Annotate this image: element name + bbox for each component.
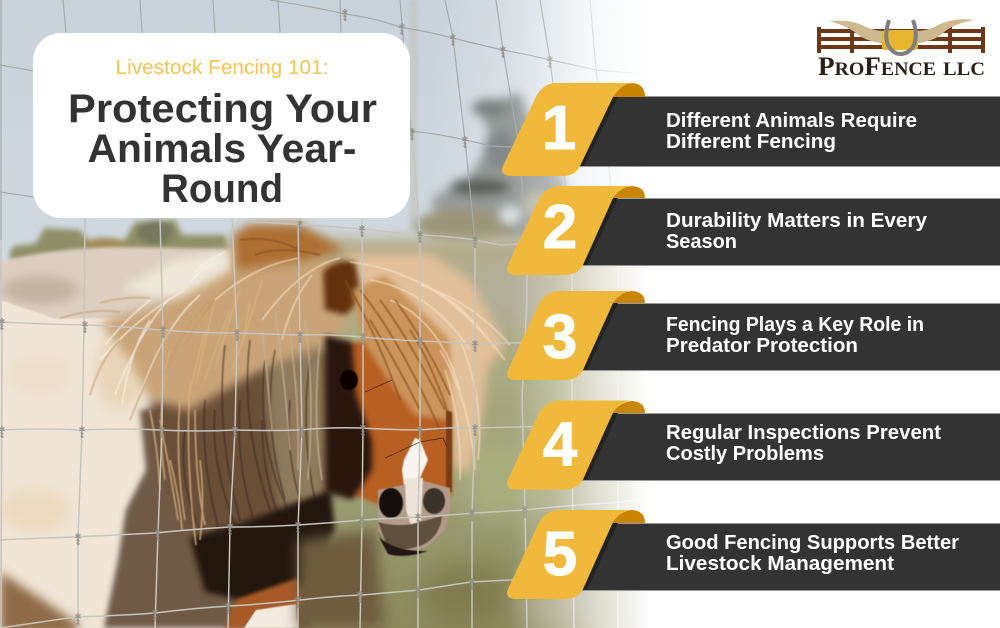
label: Regular Inspections Prevent: [666, 422, 941, 444]
dark cheek: [325, 335, 372, 500]
head: [340, 340, 452, 505]
sky brightening at right: [430, 0, 650, 260]
title card: [33, 33, 410, 218]
field mottling: [420, 250, 590, 628]
distant treeline: [10, 220, 232, 262]
logo: ProFence LLC: [817, 19, 985, 81]
white fade to right side: [510, 0, 650, 628]
forehead tuft: [323, 261, 362, 315]
label: Different Animals Require: [666, 110, 917, 132]
hair strands: pale shoulder: [100, 252, 225, 405]
label: Season: [666, 231, 737, 253]
hair strands: sunlit mane: [215, 258, 510, 480]
label: [666, 110, 917, 153]
fence wires over sky: [0, 0, 650, 240]
upper golden mane: [100, 258, 350, 410]
label: Durability Matters in Every: [666, 210, 928, 232]
band: [575, 524, 1000, 590]
band: [575, 304, 1000, 370]
hair strands: tan side mane: [262, 310, 322, 480]
label: [666, 314, 924, 357]
mane grey-tan right side: [265, 310, 326, 510]
step 1 ribbon: [502, 83, 1000, 176]
yellow barrel: [882, 30, 918, 50]
fence rails and posts: [817, 27, 985, 53]
number: 3: [543, 303, 577, 372]
orange neck patch: [225, 578, 305, 628]
main title: Round: [161, 167, 283, 211]
nostril right: [423, 488, 445, 514]
fence knots: [0, 9, 552, 625]
mane mid brown: [150, 350, 330, 530]
step 3 ribbon: [507, 291, 1000, 380]
brown hair beside muzzle: [298, 530, 385, 628]
fold shadow: [583, 413, 618, 480]
bottom-left brown hair: [0, 572, 78, 628]
band: [575, 198, 1000, 266]
fold shadow: [583, 303, 618, 370]
number: 4: [543, 410, 578, 479]
eye: [340, 370, 358, 390]
number: 5: [543, 520, 577, 589]
step 4 ribbon: [507, 400, 1000, 490]
hair strands: tan wisps: [60, 280, 235, 420]
pony body: [0, 300, 170, 628]
main title: [68, 87, 377, 211]
blurred tree: [415, 92, 580, 244]
sunlit mane fringe: [345, 254, 505, 475]
grass field: [290, 238, 730, 628]
label: Fencing Plays a Key Role in: [666, 314, 924, 336]
band: [575, 96, 1000, 166]
logo wordmark: PROFENCE: [818, 52, 936, 81]
hair strands: dark mane: [183, 340, 315, 535]
yellow tab: [507, 400, 630, 490]
hair strands: golden highlights: [150, 280, 262, 545]
step 5 ribbon: [507, 510, 1000, 599]
fold shadow: [583, 198, 618, 265]
number: 1: [542, 94, 576, 163]
yellow tab: [507, 291, 630, 380]
fence wires vertical: [1, 131, 618, 628]
fold: [612, 510, 645, 523]
label: [666, 532, 959, 575]
number: 2: [543, 193, 577, 262]
second animal in background: [0, 247, 240, 325]
fold: [612, 83, 645, 97]
main title: Protecting Your: [68, 87, 377, 131]
orange crest: [232, 224, 345, 272]
yellow tab: [502, 83, 630, 176]
main title: Animals Year-: [88, 127, 356, 171]
label: Costly Problems: [666, 443, 824, 465]
horseshoe: [886, 20, 916, 54]
lower lip: [379, 537, 428, 556]
fold: [612, 186, 645, 198]
blurred utility pole: [409, 0, 418, 230]
blaze lower: [405, 478, 423, 528]
yellow tab: [507, 510, 630, 599]
label: Good Fencing Supports Better: [666, 532, 959, 554]
logo suffix: LLC: [943, 59, 985, 80]
subtitle: Livestock Fencing 101:: [116, 57, 328, 79]
mouth: [378, 516, 442, 550]
face white blaze: [402, 438, 428, 530]
label: Predator Protection: [666, 335, 858, 357]
muzzle: [378, 480, 450, 553]
longhorn horns: [829, 19, 974, 45]
forelock over face: [352, 275, 452, 420]
label: Livestock Management: [666, 553, 894, 575]
label: Different Fencing: [666, 131, 836, 153]
pale shoulder patch: [244, 604, 298, 628]
neck under mane: [104, 390, 330, 628]
wispy white hair: [120, 250, 232, 300]
fold: [612, 401, 645, 413]
yellow tab: [507, 186, 630, 275]
label: [666, 422, 941, 465]
hair strands: brown forelock: [240, 239, 450, 430]
deep shadow under neck: [190, 490, 335, 602]
scar lines on face: [365, 380, 447, 458]
fold shadow: [580, 97, 618, 166]
fence wires horizontal: [0, 222, 660, 628]
right face edge: [446, 410, 452, 492]
body shading: [0, 330, 144, 532]
band: [575, 414, 1000, 480]
label: [666, 210, 928, 253]
nostril left: [379, 488, 403, 518]
fold: [612, 291, 645, 303]
fold shadow: [583, 523, 618, 590]
step 2 ribbon: [507, 186, 1000, 275]
